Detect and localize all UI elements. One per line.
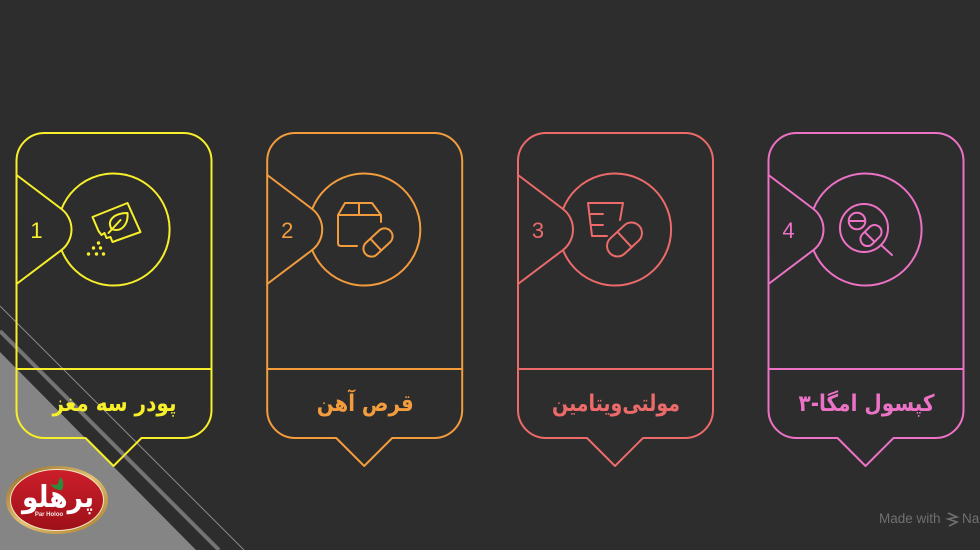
background: grey diagonal corner [0,306,244,550]
card 4: pink [768,133,964,466]
card 3 frame [518,133,713,466]
watermark [879,511,980,526]
card 3 label: مولتی‌ویتامین [552,391,680,417]
icon: cup with capsule [588,203,646,261]
card 1 number: 1 [30,218,43,243]
icon: magnifier over pills [840,204,892,255]
card 3 circle [563,174,671,286]
icon: powder sachet with leaf [87,203,140,256]
card 2 circle [312,174,420,286]
watermark: Made with [879,511,941,526]
card 1 number tab [16,175,72,284]
card 3 number: 3 [532,218,544,243]
card 3 number tab [518,175,573,284]
logo latin tagline: Par Holoo [35,512,63,518]
card 4 frame [768,133,964,466]
card 4 circle [814,174,922,286]
logo wordmark: پرهلو [20,480,94,515]
icon: box with pill [338,203,396,260]
logo [6,466,108,534]
card 4 number: 4 [782,218,795,243]
watermark icon [948,513,957,526]
card 1 circle [62,174,170,286]
card 2 number tab [267,175,322,284]
card 2 frame [267,133,462,466]
card 1 label: پودر سه مغز [52,391,176,417]
card 1 frame [16,133,212,466]
card 1: yellow [16,133,212,466]
card 2: orange [267,133,462,466]
card 4 number tab [768,175,824,284]
card 2 number: 2 [281,218,293,243]
card 3: coral [518,133,713,466]
card 2 label: قرص آهن [317,388,414,417]
card 4 label: کپسول امگا-۳ [798,390,935,417]
logo leaf [50,477,63,490]
